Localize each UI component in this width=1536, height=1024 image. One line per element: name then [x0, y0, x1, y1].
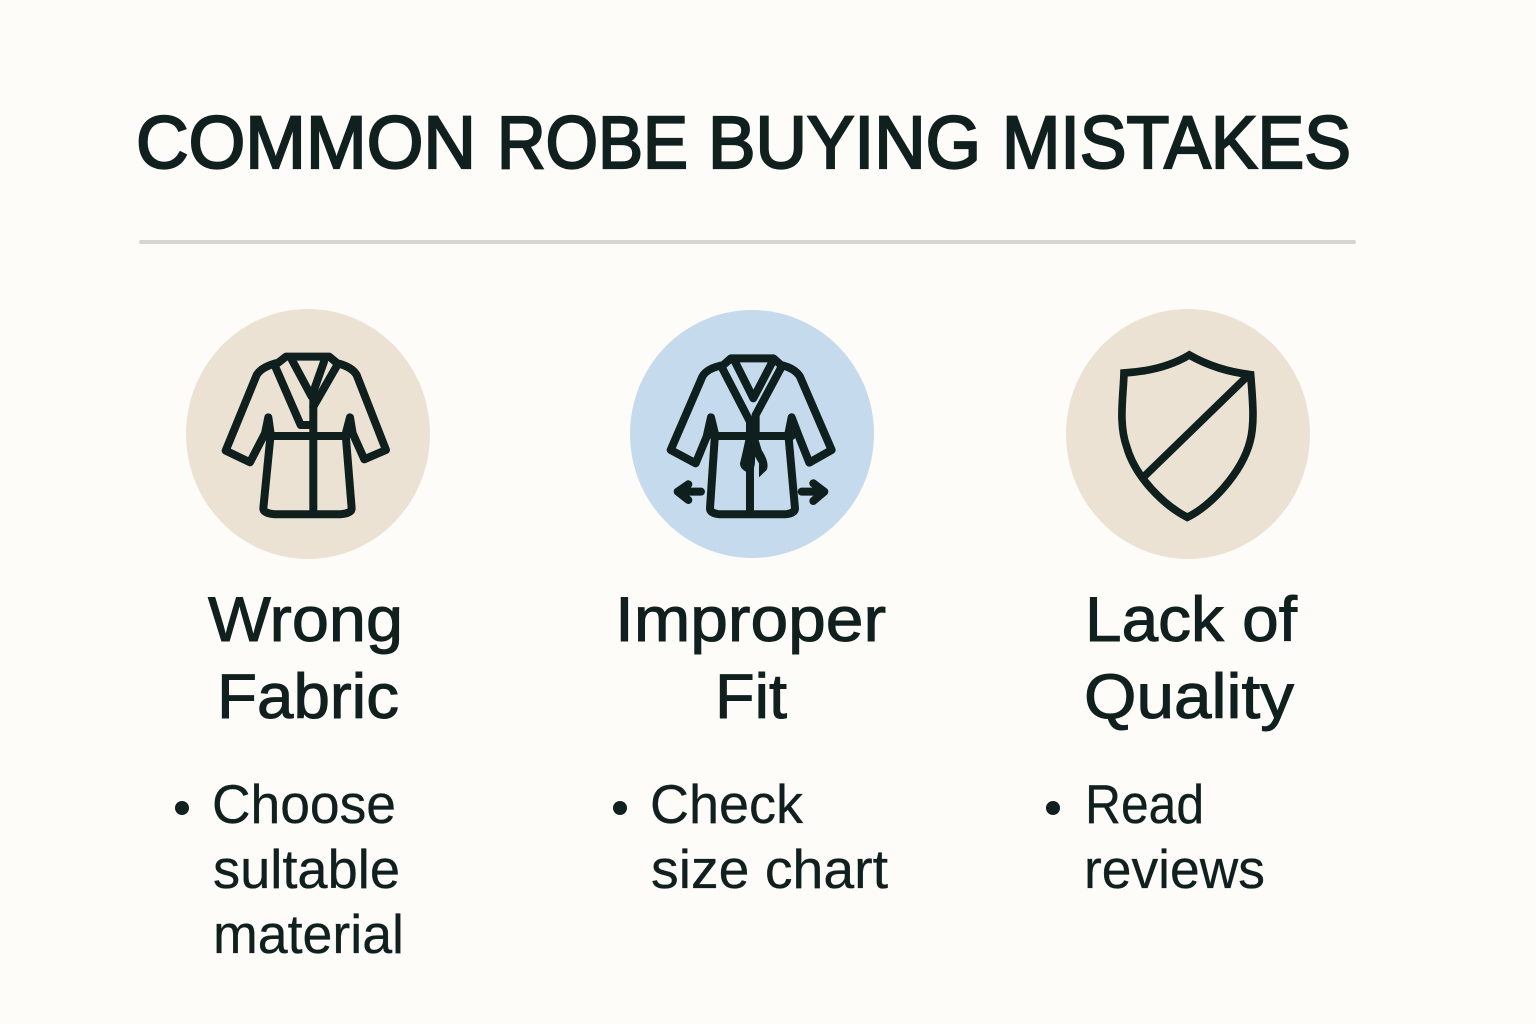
title: BUYING [708, 101, 981, 184]
heading: improper fit: Fit [715, 662, 788, 732]
title: MISTAKES [1002, 101, 1351, 184]
bullet: check size chart: Check [650, 773, 803, 835]
bullet: choose material [175, 773, 404, 965]
panel: improper fit [613, 310, 888, 900]
bullet: read reviews: reviews [1084, 838, 1265, 900]
bullet: check size chart [613, 773, 888, 900]
icon: robe on beige circle [186, 309, 430, 559]
heading: lack of quality [1084, 585, 1298, 732]
title: COMMON [136, 101, 476, 184]
heading: wrong fabric: Wrong [208, 585, 403, 655]
bullet: read reviews: Read [1085, 773, 1204, 835]
heading: improper fit [615, 585, 886, 732]
heading: wrong fabric [208, 585, 403, 732]
heading: wrong fabric: Fabric [217, 662, 399, 732]
panel: lack of quality [1046, 309, 1310, 900]
title [136, 101, 1351, 184]
bullet: read reviews [1046, 773, 1265, 900]
heading: lack of quality: Quality [1084, 662, 1295, 732]
bullet: check size chart: size chart [651, 838, 888, 900]
heading: improper fit: Improper [615, 585, 886, 655]
icon: robe with belt and arrows on blue circle [630, 310, 874, 558]
heading: lack of quality: Lack of [1085, 585, 1298, 655]
title: ROBE [497, 101, 688, 184]
bullet: choose material: material [213, 903, 404, 965]
icon: slashed shield on beige circle [1066, 309, 1310, 559]
panel: wrong fabric [175, 309, 430, 965]
bullet: choose material: sultable [213, 838, 400, 900]
bullet: choose material: Choose [212, 773, 396, 835]
